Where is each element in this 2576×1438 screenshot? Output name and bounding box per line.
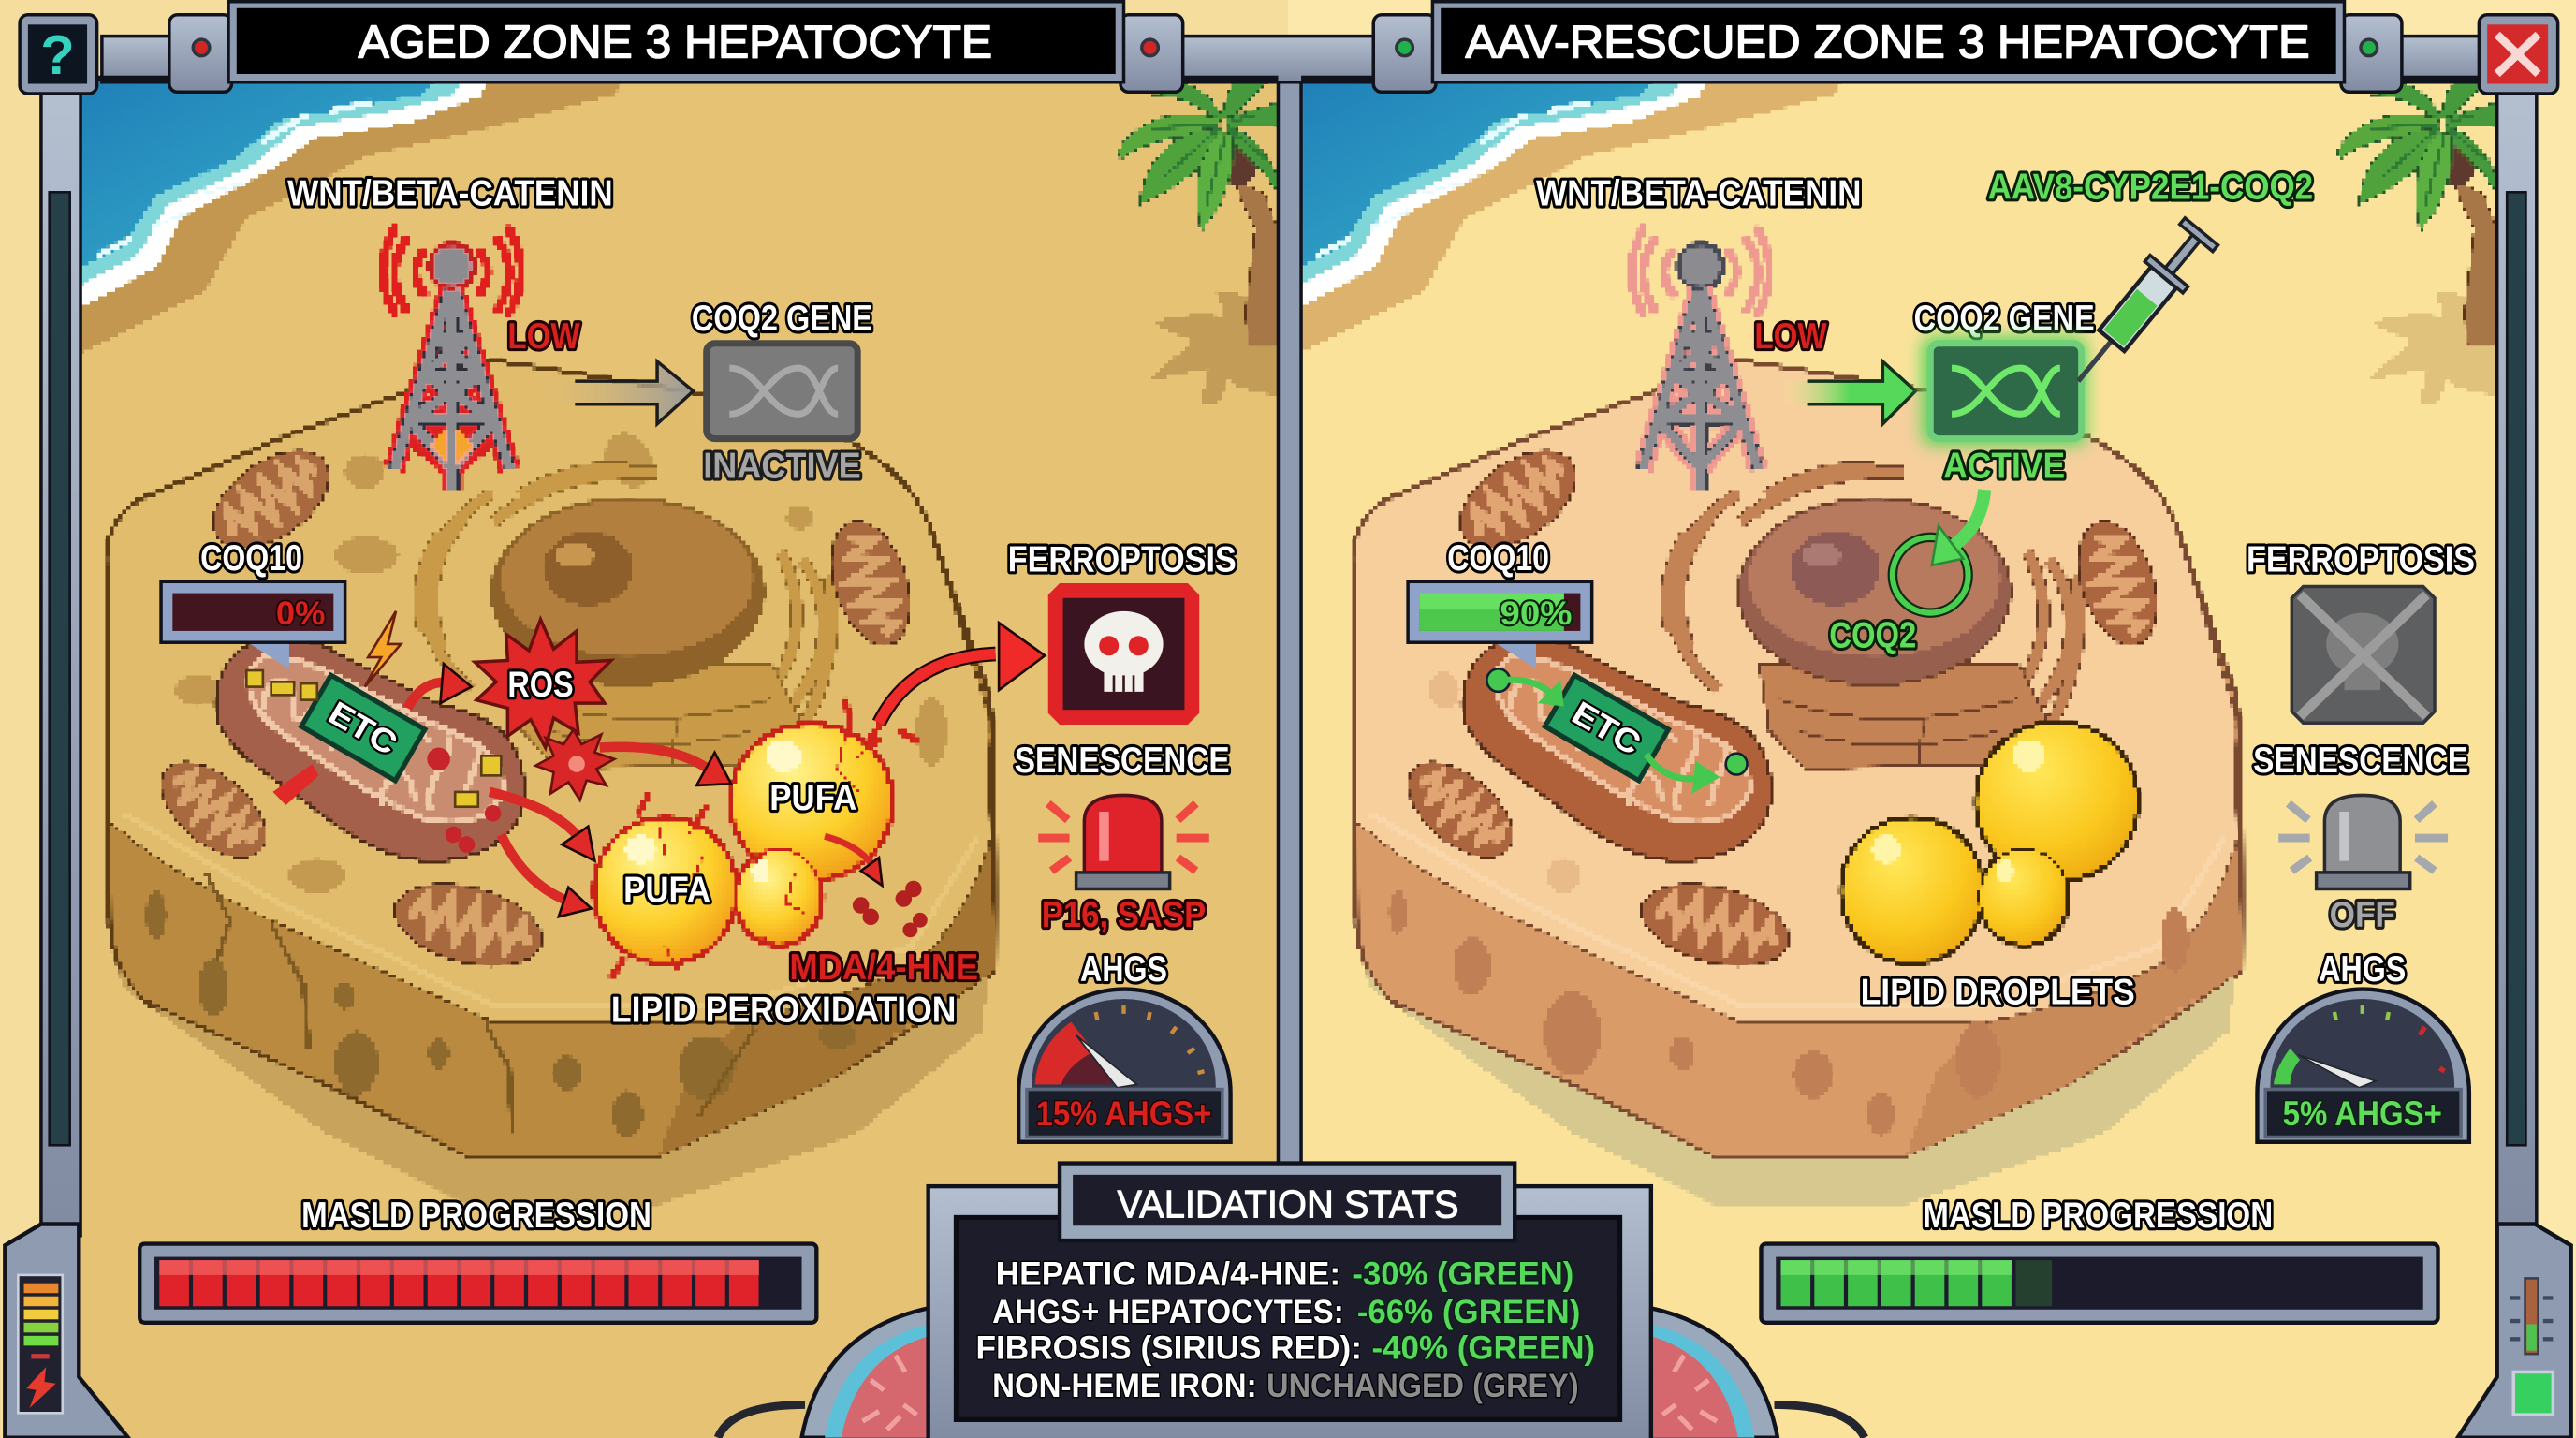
icon: skull: [1048, 583, 1199, 725]
title bar: aged: [169, 2, 1183, 92]
arrows: damage cascade: [407, 623, 1045, 917]
title bar: rescued: [1373, 2, 2402, 92]
arrow: grey to gene: [539, 361, 694, 424]
icon: brain dome left: [718, 1308, 929, 1438]
panel: validation stats: [929, 1164, 1651, 1438]
gauge: coq10 rescued 90%: 90%: [1500, 595, 1573, 632]
gauge: ahgs rescued: [2257, 990, 2469, 1142]
arrow and circle: coq2 plasmid: [1893, 490, 1984, 613]
icon: red alarm: [1038, 795, 1209, 888]
icon: syringe: [2059, 216, 2220, 397]
label: off: OFF: [2330, 895, 2395, 935]
stat: ahgs hepatocytes: AHGS+ HEPATOCYTES:: [992, 1294, 1344, 1330]
aged hepatocyte cell: [107, 361, 994, 1204]
stat: fibrosis: [976, 1329, 1595, 1366]
label: ferroptosis aged: FERROPTOSIS: [1008, 540, 1237, 580]
droplets: rescued: [1841, 723, 2137, 962]
label: low rescued: LOW: [1754, 316, 1827, 357]
ros burst: ROS: [507, 665, 574, 705]
label: coq2: COQ2: [1829, 615, 1916, 655]
label: pufa lower: PUFA: [623, 871, 710, 911]
progress bar: masld aged: [139, 1244, 816, 1323]
rescued hepatocyte cell: [1354, 361, 2241, 1204]
gauge: coq10 aged 0%: 0%: [276, 595, 326, 632]
mitochondrion details: electron flow: [1486, 668, 1748, 794]
label: senescence rescued: SENESCENCE: [2253, 741, 2468, 781]
icon: close button: [2479, 15, 2558, 94]
label: lipid droplets: LIPID DROPLETS: [1861, 972, 2135, 1012]
label: senescence aged: SENESCENCE: [1015, 741, 1230, 781]
progress bar: masld rescued: [1761, 1244, 2438, 1323]
gauge: ahgs aged: 15% AHGS+: [1036, 1094, 1211, 1133]
icon: active gene box: [1922, 337, 2086, 446]
stat: ahgs hepatocytes: [992, 1294, 1580, 1330]
etc chip: rescued: ETC: [1566, 695, 1647, 762]
signal tower: rescued: [1632, 227, 1769, 490]
heading: validation stats: [1060, 1164, 1515, 1240]
icon: inactive gene box: [707, 344, 857, 439]
label: wnt aged: WNT/BETA-CATENIN: [287, 173, 613, 213]
label: mda: MDA/4-HNE: [789, 947, 978, 988]
arrow: green to gene: [1784, 361, 1915, 424]
etc chip: aged: [301, 675, 425, 781]
label: coq10 aged: COQ10: [200, 538, 302, 579]
device: thermometer and status light: [2458, 1224, 2571, 1438]
title bar: rescued: AAV-RESCUED ZONE 3 HEPATOCYTE: [1466, 17, 2310, 67]
label: active: ACTIVE: [1943, 447, 2065, 487]
stat: hepatic mda: [996, 1255, 1573, 1292]
label: ahgs rescued: AHGS: [2319, 949, 2406, 990]
stat: fibrosis: -40% (GREEN): [1372, 1329, 1595, 1366]
stat: non-heme iron: [992, 1368, 1579, 1404]
stat: fibrosis: FIBROSIS (SIRIUS RED):: [976, 1329, 1362, 1366]
icon: grey alarm: [2278, 795, 2448, 888]
stat: hepatic mda: HEPATIC MDA/4-HNE:: [996, 1255, 1340, 1292]
label: ferroptosis rescued: FERROPTOSIS: [2247, 540, 2475, 580]
mitochondrion details: damage: [246, 611, 501, 853]
label: coq2 gene aged: COQ2 GENE: [692, 299, 872, 339]
stat: non-heme iron: NON-HEME IRON:: [992, 1368, 1257, 1404]
label: aav8 vector: AAV8-CYP2E1-COQ2: [1988, 167, 2313, 207]
stat: non-heme iron: UNCHANGED (GREY): [1266, 1368, 1579, 1404]
icon: help button: ?: [40, 23, 75, 86]
label: coq2 gene rescued: COQ2 GENE: [1914, 299, 2095, 339]
label: masld rescued: MASLD PROGRESSION: [1923, 1196, 2273, 1236]
etc chip: aged: ETC: [322, 695, 403, 762]
ros burst: [475, 620, 611, 748]
label: p16 sasp: P16, SASP: [1042, 895, 1206, 935]
label: wnt rescued: WNT/BETA-CATENIN: [1536, 173, 1862, 213]
device: battery gauge: [5, 1224, 128, 1438]
panel: rescued beach background: [1301, 79, 2497, 1438]
panel: aged beach background: [82, 79, 1278, 1438]
toxic dots: mda: [853, 881, 928, 937]
etc chip: rescued: [1545, 675, 1668, 781]
heading: validation stats: VALIDATION STATS: [1117, 1181, 1459, 1225]
icon: disabled skull: [2291, 587, 2435, 723]
label: masld aged: MASLD PROGRESSION: [301, 1196, 651, 1236]
icon: help button: [20, 15, 97, 94]
gauge: ahgs rescued: 5% AHGS+: [2283, 1094, 2442, 1133]
droplets: pufa aged: [594, 698, 920, 977]
gauge: ahgs aged: [1018, 990, 1231, 1142]
label: low aged: LOW: [507, 316, 580, 357]
stat: hepatic mda: -30% (GREEN): [1352, 1255, 1573, 1292]
label: pufa upper: PUFA: [769, 778, 856, 818]
title bar: aged: AGED ZONE 3 HEPATOCYTE: [359, 17, 992, 67]
label: ahgs aged: AHGS: [1080, 949, 1167, 990]
ros spark: [535, 729, 614, 800]
gauge: coq10 rescued 90%: [1408, 581, 1592, 668]
label: inactive: INACTIVE: [703, 447, 861, 487]
label: lipid peroxidation: LIPID PEROXIDATION: [611, 990, 956, 1031]
signal tower: aged: [383, 227, 520, 490]
gauge: coq10 aged 0%: [161, 581, 345, 668]
label: coq10 rescued: COQ10: [1447, 538, 1549, 579]
icon: brain dome right: [1649, 1308, 1865, 1438]
stat: ahgs hepatocytes: -66% (GREEN): [1357, 1294, 1580, 1330]
